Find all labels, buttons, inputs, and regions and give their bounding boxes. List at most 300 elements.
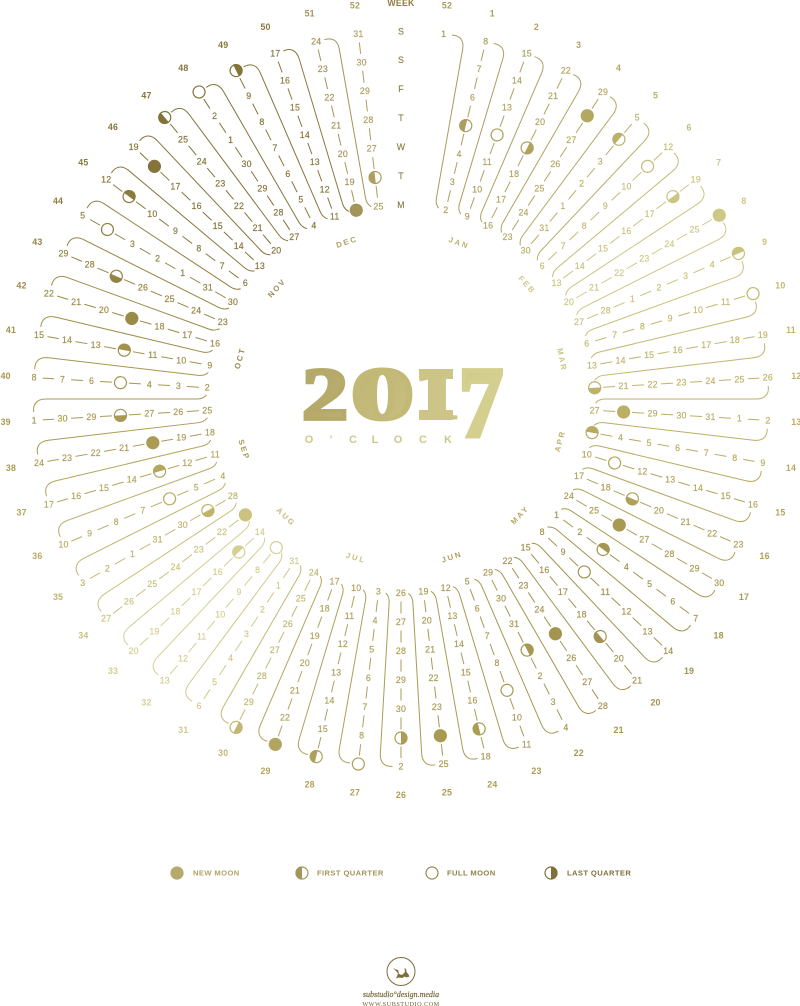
week 10 spoke: 11 <box>721 297 731 307</box>
week 33 spoke: 33 <box>108 666 118 676</box>
week 52 spoke: 30 <box>357 57 367 67</box>
moon: new <box>710 206 728 224</box>
week 51 spoke: 51 <box>305 9 315 19</box>
week 42 spoke: 42 <box>17 280 27 290</box>
week 28 spoke: 11 <box>345 611 354 621</box>
week 8 spoke: 20 <box>564 297 574 307</box>
month label: JAN: JAN <box>447 235 471 251</box>
week 47 spoke: 21 <box>253 223 263 233</box>
week 32 spoke <box>122 527 286 712</box>
moon: full <box>607 455 622 470</box>
legend item: full moon: FULL MOON <box>447 868 496 878</box>
week 33 spoke: 19 <box>149 627 160 637</box>
week 31 spoke: 3 <box>244 629 249 639</box>
spoke: Jan 1: 1 <box>441 29 446 39</box>
week 14 spoke: 4 <box>618 433 623 443</box>
week 21 spoke: 21 <box>614 725 624 735</box>
month label: SEP: SEP <box>236 438 252 462</box>
week 17 spoke: 29 <box>689 564 700 574</box>
week 29 spoke: 29 <box>260 766 271 776</box>
week 5 spoke: 31 <box>539 223 549 233</box>
week 27 spoke: 4 <box>373 615 378 625</box>
week 11 spoke: 15 <box>644 350 654 360</box>
week 45 spoke: 45 <box>78 158 88 168</box>
week 2 spoke: 14 <box>512 75 522 85</box>
week 35 spoke: 28 <box>228 491 238 501</box>
week 36 spoke: 8 <box>114 517 119 527</box>
week 13 spoke <box>588 403 800 448</box>
week 7 spoke: 15 <box>598 244 608 254</box>
week 29 spoke: 19 <box>310 631 320 641</box>
week 3 spoke: 16 <box>483 221 493 231</box>
week 39 spoke: 25 <box>202 405 212 415</box>
week 23 spoke: 23 <box>531 766 542 776</box>
week 28 spoke: 15 <box>318 724 328 734</box>
week 10 spoke: 8 <box>640 322 645 332</box>
month label: NOV: NOV <box>266 276 288 300</box>
week 19 spoke <box>521 523 699 694</box>
legend item: full moon <box>426 867 496 879</box>
week 44 spoke: 44 <box>53 196 63 206</box>
moon: last quarter <box>591 628 609 646</box>
week 21 spoke: 26 <box>566 653 576 663</box>
week 23 spoke: 8 <box>495 658 500 668</box>
week 25 spoke: 25 <box>442 787 452 797</box>
week 49 spoke: 8 <box>259 117 264 127</box>
moon: full <box>489 127 505 143</box>
week 3 spoke: 21 <box>548 91 558 101</box>
week 25 spoke: 22 <box>429 673 439 683</box>
week 39 spoke: 1 <box>32 415 37 425</box>
month label: APR: APR <box>553 429 567 453</box>
week 48 spoke: 48 <box>178 63 188 73</box>
week 34 spoke <box>63 491 255 645</box>
week 42 spoke <box>14 259 228 351</box>
week 33 spoke: 18 <box>170 607 181 617</box>
week 30 spoke: 29 <box>244 697 254 707</box>
week 38 spoke: 18 <box>205 428 215 438</box>
moon: new <box>145 435 160 450</box>
week 48 spoke: 30 <box>241 159 252 169</box>
week 9 spoke: 2 <box>656 283 662 293</box>
week 28 spoke: 13 <box>331 667 341 677</box>
week 51 spoke: 19 <box>344 177 355 187</box>
week 8 spoke: 24 <box>664 239 675 249</box>
moon: last quarter <box>519 139 536 157</box>
legend item: new moon <box>170 866 240 880</box>
week 42 spoke: 20 <box>99 305 109 315</box>
week 20 spoke: 15 <box>521 543 531 553</box>
week 35 spoke: 2 <box>105 564 110 574</box>
moon: full <box>576 563 593 580</box>
week 52 spoke: 31 <box>353 29 363 39</box>
moon: full <box>191 84 207 100</box>
week 20 spoke: 17 <box>558 587 568 597</box>
moon: last quarter <box>151 463 168 479</box>
week 25 spoke: 21 <box>425 644 435 654</box>
moon: last quarter <box>117 343 132 357</box>
week 36 spoke: 7 <box>140 505 146 515</box>
week 13 spoke: 31 <box>705 412 716 422</box>
week 42 spoke: 21 <box>71 297 81 307</box>
week 8 spoke: 22 <box>614 268 624 278</box>
week 26 spoke: 30 <box>396 704 406 714</box>
moon: new <box>546 625 565 643</box>
week 45 spoke: 6 <box>243 278 248 288</box>
week 7 spoke <box>547 154 738 308</box>
week 47 spoke: 25 <box>178 134 188 144</box>
week 30 spoke: 24 <box>309 567 319 577</box>
week 27 spoke: 3 <box>376 587 381 597</box>
week 9 spoke: 1 <box>630 294 635 304</box>
week 2 spoke: 9 <box>465 212 470 222</box>
week 1 spoke: 6 <box>470 92 475 102</box>
week 4 spoke: 25 <box>534 183 545 193</box>
week 11 spoke <box>585 324 800 391</box>
moon: new <box>124 310 140 327</box>
week 5 spoke: 1 <box>560 201 566 211</box>
moon: new <box>578 107 596 125</box>
week 14 spoke: 5 <box>647 438 652 448</box>
week 35 spoke: 35 <box>53 592 63 602</box>
week 3 spoke: 20 <box>535 117 545 127</box>
week 33 spoke: 20 <box>129 646 139 656</box>
week 25 spoke: 25 <box>439 759 449 769</box>
week 11 spoke: 11 <box>786 325 796 335</box>
week 50 spoke: 16 <box>280 75 290 85</box>
week 51 spoke <box>302 2 382 218</box>
moon: first quarter <box>199 502 217 520</box>
week 19 spoke: 11 <box>601 587 610 597</box>
week 7 spoke: 13 <box>552 278 562 288</box>
week 7 spoke: 14 <box>575 261 585 271</box>
moon: full <box>746 286 761 301</box>
week 5 spoke: 5 <box>653 91 658 101</box>
week 27 spoke <box>329 584 385 799</box>
week 30 spoke: 28 <box>257 671 267 681</box>
header spoke: week and days of the week: S <box>398 26 404 36</box>
week 20 spoke: 20 <box>650 697 661 707</box>
moon: last quarter <box>229 543 248 561</box>
week 18 spoke: 7 <box>693 613 698 623</box>
week 22 spoke: 31 <box>509 619 519 629</box>
week 32 spoke: 11 <box>197 631 207 641</box>
week 28 spoke <box>284 576 364 792</box>
week 52 spoke <box>348 0 385 213</box>
week 24 spoke: 12 <box>441 583 451 593</box>
week 26 spoke: 27 <box>396 617 406 627</box>
week 24 spoke: 18 <box>481 752 491 762</box>
week 36 spoke: 36 <box>32 551 42 561</box>
week 34 spoke: 24 <box>171 562 181 572</box>
week 4 spoke: 26 <box>550 159 561 169</box>
week 17 spoke <box>550 487 753 622</box>
week 16 spoke <box>563 467 773 582</box>
week 41 spoke: 14 <box>62 335 72 345</box>
week 5 spoke <box>516 87 678 272</box>
week 29 spoke: 20 <box>300 658 310 668</box>
week 50 spoke: 17 <box>270 49 280 59</box>
week 18 spoke: 6 <box>670 596 675 606</box>
week 16 spoke: 21 <box>681 517 691 527</box>
week 36 spoke: 5 <box>194 482 199 492</box>
week 2 spoke: 11 <box>482 157 492 167</box>
moon: last quarter <box>228 62 245 79</box>
week 11 spoke: 18 <box>730 335 740 345</box>
week 45 spoke: 8 <box>196 244 201 254</box>
week 44 spoke: 2 <box>155 254 160 264</box>
title: 2017 <box>302 348 503 458</box>
week 27 spoke: 6 <box>366 673 371 683</box>
week 24 spoke <box>420 580 500 796</box>
header spoke: week and days of the week: W <box>397 142 406 152</box>
moon: first quarter <box>610 130 628 148</box>
week 21 spoke: 23 <box>518 580 529 590</box>
week 18 spoke: 2 <box>577 527 582 537</box>
week 52 spoke: 25 <box>373 201 384 211</box>
week 37 spoke: 11 <box>210 450 220 460</box>
week 31 spoke: 31 <box>289 556 299 566</box>
week 40 spoke <box>0 350 212 394</box>
week 16 spoke: 16 <box>760 551 770 561</box>
week 7 spoke: 16 <box>621 226 631 236</box>
week 9 spoke: 3 <box>683 271 688 281</box>
week 46 spoke <box>103 104 282 276</box>
week 39 spoke: 29 <box>86 412 97 422</box>
week 50 spoke: 50 <box>260 22 271 32</box>
week 35 spoke: 3 <box>80 578 85 588</box>
week 5 spoke: 5 <box>635 112 640 122</box>
week 43 spoke: 29 <box>58 248 69 258</box>
week 15 spoke: 14 <box>693 483 703 493</box>
week 16 spoke: 20 <box>654 505 664 515</box>
week 39 spoke: 27 <box>144 409 155 419</box>
week 13 spoke: 29 <box>647 409 658 419</box>
week 14 spoke: 8 <box>732 453 737 463</box>
month label: MAR: MAR <box>555 347 569 373</box>
week 41 spoke: 41 <box>6 325 16 335</box>
week 52 spoke: 27 <box>367 144 377 154</box>
week 44 spoke: 5 <box>80 210 85 220</box>
week 37 spoke: 14 <box>127 475 137 485</box>
week 47 spoke: 22 <box>234 201 244 211</box>
week 6 spoke: 12 <box>663 142 673 152</box>
moon: full <box>162 491 177 507</box>
title: 2017: 0 <box>351 354 414 435</box>
week 42 spoke: 18 <box>154 322 165 332</box>
week 32 spoke: 12 <box>178 654 188 664</box>
week 1 spoke: 8 <box>483 36 488 46</box>
moon: first quarter <box>108 268 125 285</box>
week 50 spoke: 14 <box>300 130 310 140</box>
month label: OCT: OCT <box>233 346 247 370</box>
week 22 spoke: 22 <box>574 748 584 758</box>
moon: full <box>268 539 285 556</box>
month label: JUN: JUN <box>440 549 464 565</box>
week 7 spoke: 17 <box>645 209 655 219</box>
week 4 spoke: 24 <box>518 208 529 218</box>
legend item: new moon: NEW MOON <box>193 868 240 878</box>
week 11 spoke: 14 <box>616 355 626 365</box>
week 16 spoke: 18 <box>601 482 611 492</box>
week 33 spoke: 17 <box>192 587 202 597</box>
week 22 spoke <box>462 563 588 770</box>
week 38 spoke: 38 <box>6 463 16 473</box>
week 20 spoke: 21 <box>632 676 642 686</box>
week 50 spoke <box>257 12 361 225</box>
week 16 spoke: 17 <box>574 471 584 481</box>
week 39 spoke: 39 <box>1 417 11 427</box>
week 20 spoke: 20 <box>614 654 624 664</box>
week 2 spoke <box>459 19 562 231</box>
week 12 spoke: 26 <box>763 373 773 383</box>
week 46 spoke: 15 <box>213 221 223 231</box>
week 44 spoke: 31 <box>203 282 213 292</box>
week 3 spoke: 17 <box>496 195 506 205</box>
week 29 spoke <box>240 567 343 779</box>
header spoke: week and days of the week <box>387 0 415 210</box>
week 5 spoke: 3 <box>598 157 603 167</box>
week 35 spoke <box>39 471 242 606</box>
week 27 spoke: 27 <box>350 787 360 797</box>
week 32 spoke: 10 <box>215 609 225 619</box>
week 17 spoke: 30 <box>714 578 724 588</box>
week 50 spoke: 15 <box>290 103 300 113</box>
week 42 spoke: 16 <box>210 338 220 348</box>
week 34 spoke: 26 <box>124 596 134 606</box>
week 11 spoke: 19 <box>758 330 768 340</box>
week 26 spoke: 29 <box>396 675 406 685</box>
week 39 spoke <box>0 385 213 429</box>
week 6 spoke: 10 <box>621 181 632 191</box>
week 27 spoke: 8 <box>359 731 364 741</box>
legend item: first quarter: FIRST QUARTER <box>317 868 384 878</box>
week 4 spoke: 4 <box>616 63 621 73</box>
week 35 spoke: 1 <box>130 549 135 559</box>
week 32 spoke: 9 <box>236 587 242 597</box>
moon: new <box>433 728 448 743</box>
week 26 spoke: 26 <box>396 588 406 598</box>
week 26 spoke: 26 <box>396 790 406 800</box>
week 52 spoke: 28 <box>363 115 373 125</box>
month label: JUL: JUL <box>345 551 367 565</box>
moon: full <box>114 376 127 389</box>
logo badge <box>387 958 415 986</box>
week 45 spoke: 12 <box>101 175 111 185</box>
moon: full <box>639 158 656 175</box>
week 3 spoke: 18 <box>509 169 519 179</box>
week 5 spoke: 30 <box>521 245 531 255</box>
moon: new <box>145 157 164 176</box>
week 15 spoke: 13 <box>665 475 675 485</box>
week 6 spoke: 8 <box>582 221 587 231</box>
week 23 spoke: 10 <box>512 713 522 723</box>
week 8 spoke <box>560 193 761 327</box>
week 25 spoke: 19 <box>418 587 429 597</box>
moon: last quarter <box>308 749 324 764</box>
week 37 spoke: 17 <box>44 499 54 509</box>
week 14 spoke <box>581 425 798 494</box>
week 41 spoke: 15 <box>34 330 44 340</box>
week 26 spoke: 28 <box>396 646 406 656</box>
week 19 spoke: 19 <box>684 666 694 676</box>
week 31 spoke: 2 <box>260 605 265 615</box>
radial calendar wheel <box>0 0 800 801</box>
moon: full <box>352 757 365 771</box>
week 24 spoke: 15 <box>461 667 471 677</box>
week 36 spoke: 10 <box>58 540 69 550</box>
moon: last quarter <box>120 187 138 205</box>
week 9 spoke: 28 <box>601 306 611 316</box>
week 17 spoke: 17 <box>739 592 749 602</box>
week 43 spoke: 24 <box>191 306 201 316</box>
week 8 spoke: 8 <box>741 196 746 206</box>
footer: studio name: substudio°design.media <box>363 990 439 999</box>
week 2 spoke: 13 <box>502 103 512 113</box>
title: 2017: 7 <box>459 348 503 458</box>
week 52 spoke: 52 <box>350 1 360 11</box>
week 22 spoke: 2 <box>538 671 543 681</box>
week 45 spoke <box>73 138 265 292</box>
moon: first quarter <box>585 425 600 440</box>
week 15 spoke <box>574 447 788 539</box>
week 15 spoke: 12 <box>637 466 648 476</box>
week 12 spoke <box>588 370 800 413</box>
week 2 spoke: 15 <box>522 49 532 59</box>
week 18 spoke: 18 <box>714 630 724 640</box>
week 28 spoke: 28 <box>305 779 315 789</box>
week 32 spoke: 8 <box>255 565 260 575</box>
week 23 spoke: 5 <box>465 576 470 586</box>
week 1 spoke: 3 <box>450 177 455 187</box>
week 19 spoke: 9 <box>561 547 566 557</box>
moon: first quarter <box>395 731 408 745</box>
week 40 spoke: 8 <box>32 373 37 383</box>
week 38 spoke <box>1 407 217 475</box>
week 1 spoke: 1 <box>490 9 495 19</box>
week 10 spoke: 10 <box>775 280 785 290</box>
week 23 spoke: 11 <box>522 739 531 749</box>
week 37 spoke: 12 <box>182 458 192 468</box>
legend item: last quarter: LAST QUARTER <box>567 868 631 878</box>
week 14 spoke: 9 <box>760 458 765 468</box>
spoke: Jan 1: 52 <box>442 1 452 11</box>
week 3 spoke <box>479 37 604 243</box>
week 6 spoke <box>533 118 710 288</box>
header spoke: week and days of the week: T <box>398 113 404 123</box>
week 49 spoke: 6 <box>285 169 290 179</box>
moon: first quarter <box>368 170 382 185</box>
week 31 spoke: 6 <box>197 701 202 711</box>
month label: MAY: MAY <box>509 504 531 526</box>
week 19 spoke: 13 <box>642 627 653 637</box>
week 17 spoke: 27 <box>639 534 649 544</box>
week 1 spoke <box>438 7 518 221</box>
week 1 spoke: 2 <box>443 205 448 215</box>
moon: last quarter <box>664 188 682 206</box>
moon: first quarter <box>458 118 473 133</box>
legend item: first quarter <box>295 866 384 880</box>
week 28 spoke: 14 <box>324 696 335 706</box>
week 37 spoke <box>8 429 223 520</box>
week 38 spoke: 21 <box>119 443 129 453</box>
week 43 spoke: 26 <box>138 283 148 293</box>
week 42 spoke: 17 <box>182 330 192 340</box>
week 28 spoke: 12 <box>338 639 348 649</box>
week 26 spoke: 2 <box>398 762 404 772</box>
week 15 spoke: 10 <box>582 450 592 460</box>
week 41 spoke: 9 <box>207 360 212 370</box>
